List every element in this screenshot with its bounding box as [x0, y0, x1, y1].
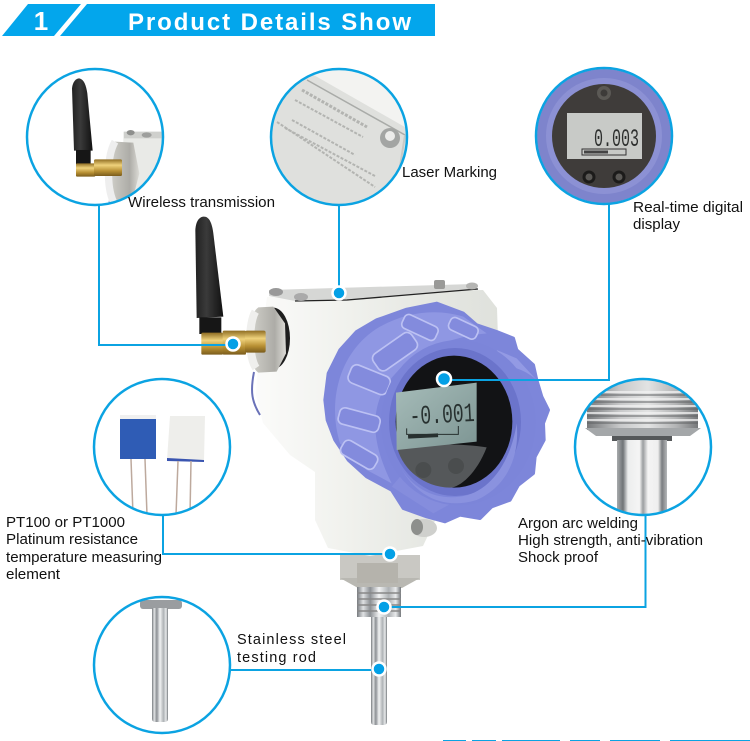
label: stainless steel rod: testing rod	[237, 650, 316, 666]
white element	[167, 416, 205, 460]
detail circle: digital display	[536, 68, 672, 204]
label: real-time digital display	[633, 200, 743, 233]
label: argon arc welding: High strength, anti-vibration	[518, 533, 703, 549]
label: platinum element: PT100 or PT1000	[6, 515, 125, 531]
knob	[597, 86, 611, 100]
knurled ring	[325, 303, 548, 522]
detail circle: welded joint	[575, 379, 711, 520]
side plug	[248, 307, 290, 373]
label: wireless transmission: Wireless transmission	[128, 195, 275, 211]
reading: -0.001	[409, 400, 475, 433]
label: platinum element: element	[6, 567, 60, 583]
bar graph	[407, 426, 458, 434]
transmitter device	[195, 217, 548, 556]
hex nut	[357, 563, 398, 583]
lower fitting	[340, 555, 420, 725]
value: 0.003	[594, 125, 639, 154]
detail circle: stainless rod	[94, 597, 230, 733]
label: platinum element: temperature measuring	[6, 550, 162, 566]
housing	[256, 290, 500, 556]
engraved text rows	[277, 90, 375, 187]
blue element	[120, 417, 156, 459]
collar	[340, 555, 420, 580]
label: platinum element	[6, 515, 162, 583]
display window	[396, 356, 512, 488]
label: real-time digital display: display	[633, 217, 681, 233]
detail circle: antenna	[27, 69, 170, 205]
section number: 1	[34, 6, 48, 36]
wires	[131, 459, 191, 515]
antenna	[195, 217, 266, 355]
label: platinum element: Platinum resistance	[6, 532, 138, 548]
shaft	[617, 440, 667, 520]
screw	[380, 128, 400, 148]
lcd	[567, 113, 642, 159]
left blue seam	[252, 372, 260, 415]
top plate	[269, 280, 478, 301]
number tab	[2, 4, 81, 36]
connector lines	[99, 203, 646, 670]
label: argon arc welding: Shock proof	[518, 550, 599, 566]
threads	[587, 380, 698, 430]
buttons	[582, 170, 596, 184]
header banner	[2, 4, 435, 36]
thread	[357, 587, 401, 617]
callout dots	[226, 286, 451, 676]
label: argon arc welding: Argon arc welding	[518, 516, 638, 532]
label: laser marking: Laser Marking	[402, 165, 497, 181]
label: real-time digital display: Real-time digital	[633, 200, 743, 216]
vent screw	[411, 519, 437, 537]
grip zone	[335, 312, 487, 483]
flange	[585, 428, 701, 436]
detail circle: platinum elements	[94, 379, 230, 515]
flat face	[497, 350, 537, 380]
title bar	[60, 4, 435, 36]
label: stainless steel rod	[237, 632, 346, 666]
grip ridges	[337, 313, 480, 471]
label: stainless steel rod: Stainless steel	[237, 632, 346, 648]
detail circle: laser marking	[270, 68, 410, 208]
probe rod	[371, 617, 387, 725]
title: Product Details Show	[128, 9, 411, 36]
label: argon arc welding	[518, 516, 703, 566]
